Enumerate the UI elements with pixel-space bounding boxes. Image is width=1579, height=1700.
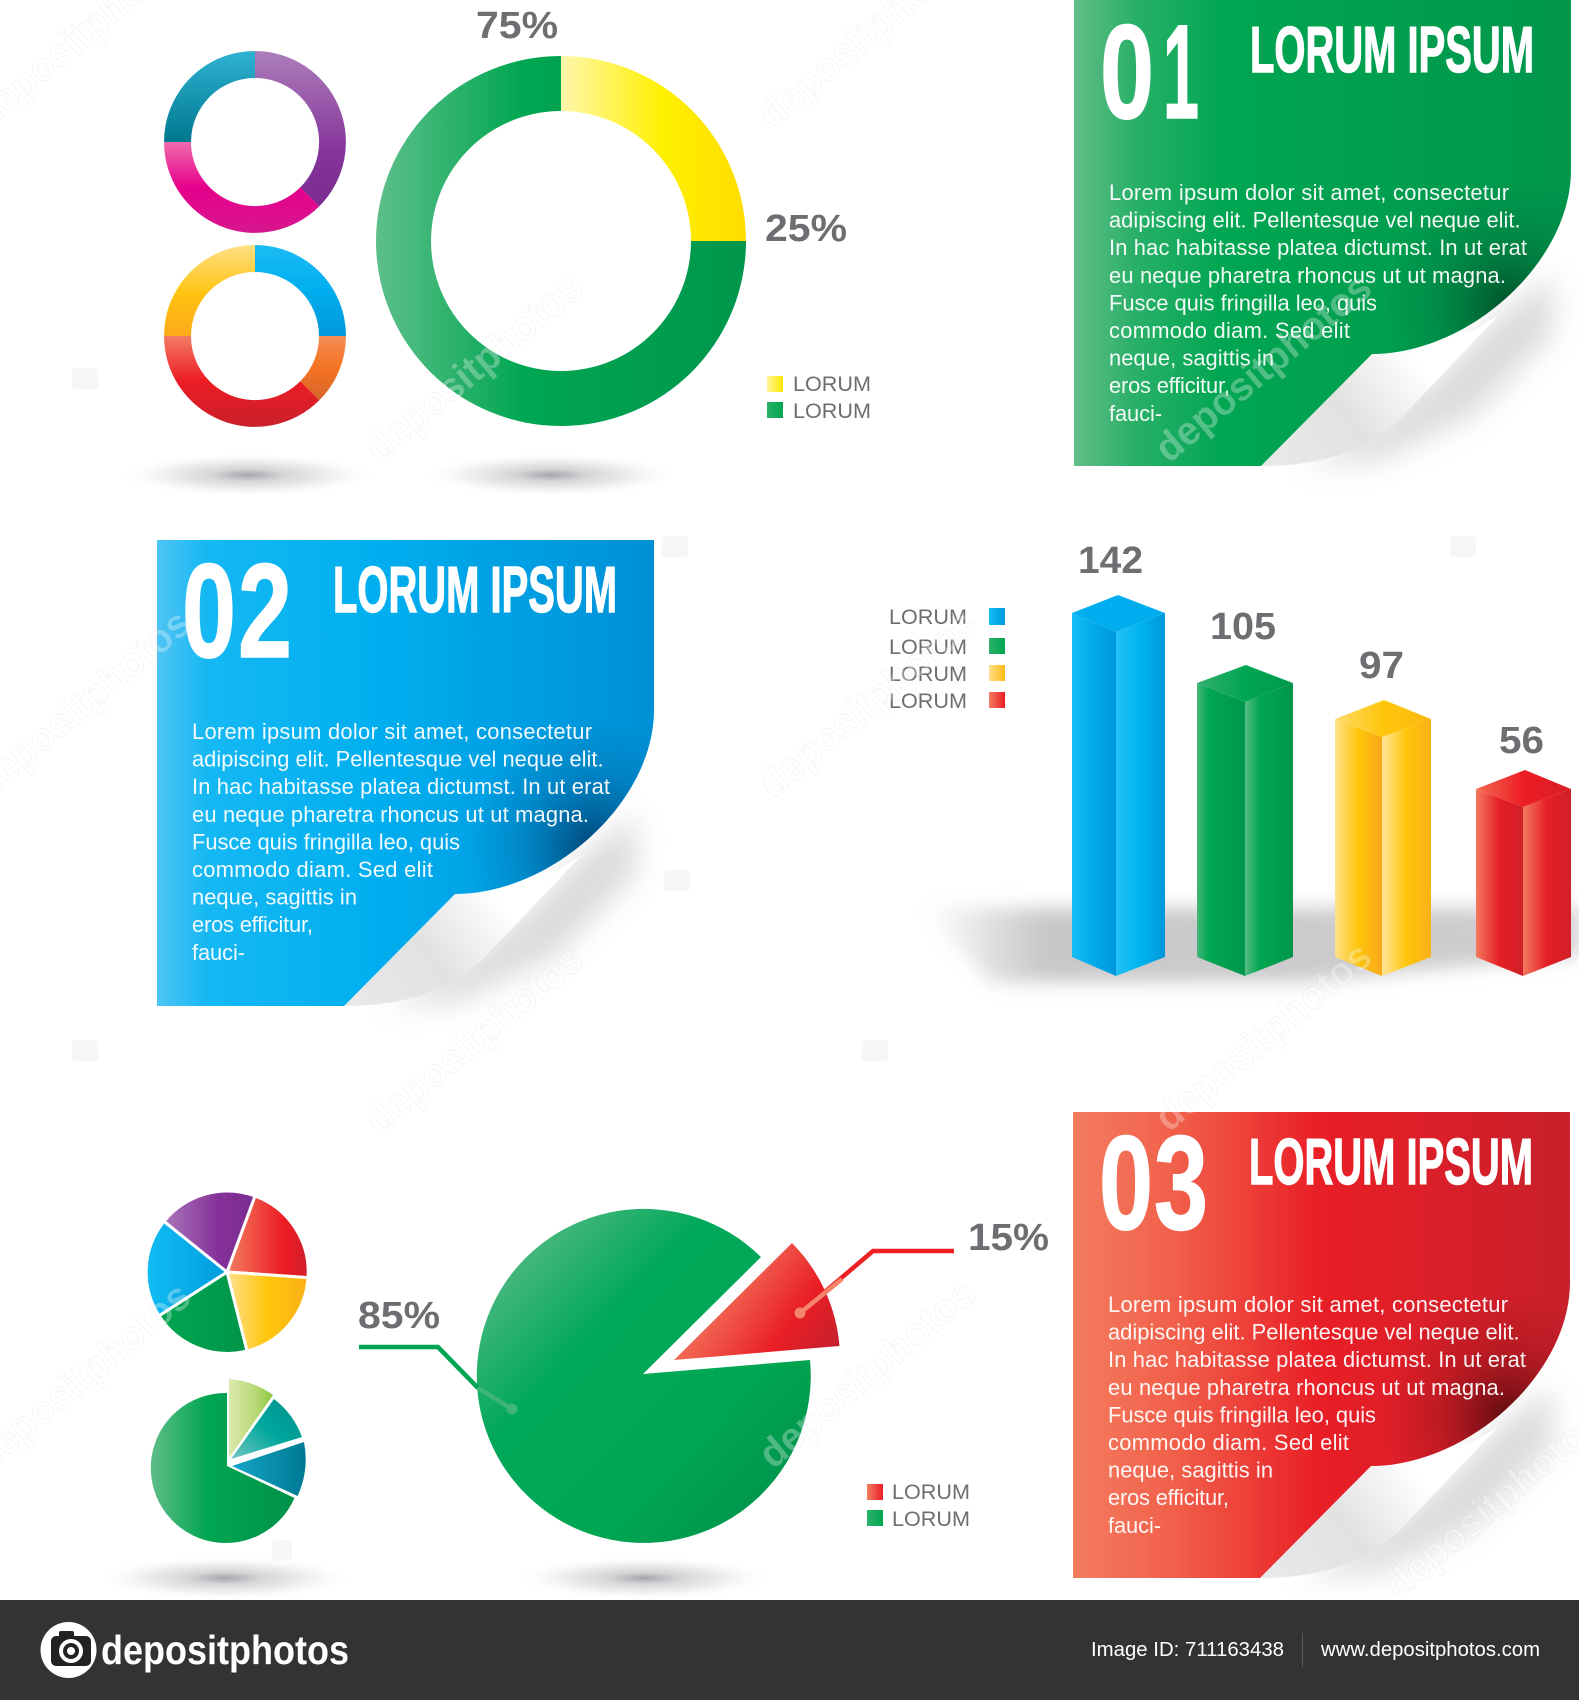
- footer bar: [0, 1600, 1579, 1700]
- bar chart: [1072, 595, 1571, 976]
- value 142: 142: [1078, 540, 1143, 582]
- body text: neque, sagittis in: [1108, 1458, 1273, 1483]
- watermarks: depositphotos: [358, 937, 591, 1143]
- pie legend: LORUM: [892, 1508, 970, 1531]
- body text: fauci-: [192, 940, 245, 965]
- pie legend: LORUM: [892, 1481, 970, 1504]
- body text: neque, sagittis in: [192, 885, 357, 910]
- body text: commodo diam. Sed elit: [1108, 1430, 1349, 1455]
- bar chart legend: LORUM: [889, 606, 967, 629]
- watermarks: depositphotos: [1147, 265, 1380, 471]
- body text: Lorem ipsum dolor sit amet, consectetur: [192, 719, 592, 744]
- body text: eu neque pharetra rhoncus ut ut magna.: [1109, 263, 1506, 288]
- body text: fauci-: [1109, 401, 1162, 426]
- bar chart shadow: [925, 908, 1579, 982]
- watermarks: depositphotos: [358, 265, 591, 471]
- label 25%: 25%: [765, 208, 847, 250]
- body text: eros efficitur,: [1108, 1485, 1229, 1510]
- panel 01: green note: 1: [1163, 0, 1199, 147]
- panel 01: green note: [1074, 0, 1571, 466]
- value 97: 97: [1359, 645, 1404, 687]
- footer logo icon: [40, 1622, 96, 1678]
- small pie chart: exploded slices: [151, 1379, 306, 1543]
- number 02: 2: [238, 537, 292, 686]
- body text: [1108, 1292, 1526, 1538]
- bar 105: [1197, 665, 1293, 976]
- donut legend: LORUM: [793, 373, 871, 396]
- footer brand name: depositphotos: [101, 1627, 349, 1673]
- small donut chart: purple, pink, blue: [164, 51, 346, 233]
- body text: Lorem ipsum dolor sit amet, consectetur: [1109, 180, 1509, 205]
- small pie chart: five slices: [146, 1191, 308, 1353]
- number 03: [1099, 1109, 1208, 1258]
- bar 142: [1072, 595, 1165, 976]
- body text: fauci-: [1108, 1513, 1161, 1538]
- body text: In hac habitasse platea dictumst. In ut erat: [1109, 235, 1527, 260]
- leader line: 85%: [359, 1347, 518, 1414]
- small donut chart: blue, orange, red, yellow: [164, 245, 346, 427]
- label 15%: 15%: [968, 1217, 1049, 1259]
- body text: [1109, 180, 1527, 426]
- large donut chart 75/25: [376, 56, 746, 426]
- body text: In hac habitasse platea dictumst. In ut erat: [192, 774, 610, 799]
- body text: Fusce quis fringilla leo, quis: [1108, 1402, 1376, 1427]
- number 01: 0: [1100, 0, 1154, 147]
- body text: In hac habitasse platea dictumst. In ut erat: [1108, 1347, 1526, 1372]
- bar chart legend: LORUM: [889, 663, 967, 686]
- label 85%: 85%: [358, 1295, 440, 1337]
- image id: Image ID: 711163438: [1091, 1639, 1284, 1661]
- donut legend: LORUM: [793, 400, 871, 423]
- bar chart legend: [889, 606, 1005, 713]
- number 03: 0: [1099, 1109, 1153, 1258]
- body text: eu neque pharetra rhoncus ut ut magna.: [192, 802, 589, 827]
- donut legend: [767, 373, 871, 423]
- body text: adipiscing elit. Pellentesque vel neque elit.: [1108, 1320, 1520, 1345]
- body text: Lorem ipsum dolor sit amet, consectetur: [1108, 1292, 1508, 1317]
- number 02: 0: [182, 537, 236, 686]
- body text: commodo diam. Sed elit: [192, 857, 433, 882]
- value 105: 105: [1210, 606, 1276, 648]
- body text: eros efficitur,: [192, 912, 313, 937]
- body text: Fusce quis fringilla leo, quis: [1109, 290, 1377, 315]
- body text: commodo diam. Sed elit: [1109, 318, 1350, 343]
- body text: neque, sagittis in: [1109, 346, 1274, 371]
- body text: Fusce quis fringilla leo, quis: [192, 829, 460, 854]
- pie legend: [867, 1481, 970, 1531]
- panel 02: blue note: [157, 537, 654, 1006]
- watermarks: depositphotos: [1147, 934, 1380, 1140]
- label 75%: 75%: [476, 5, 558, 47]
- body text: [192, 719, 610, 965]
- body text: adipiscing elit. Pellentesque vel neque elit.: [1109, 208, 1521, 233]
- bar 97: [1335, 700, 1431, 976]
- number 02: [182, 537, 292, 686]
- bar chart legend: LORUM: [889, 690, 967, 713]
- footer divider: [1302, 1633, 1303, 1667]
- panel 03: red note: [1073, 1109, 1570, 1578]
- number 03: 3: [1154, 1109, 1208, 1258]
- bar chart legend: LORUM: [889, 636, 967, 659]
- ground shadows under donuts: [118, 453, 681, 497]
- faint camera watermarks: [72, 368, 1476, 1561]
- watermarks: depositphotos: [751, 1271, 984, 1477]
- bar 56: [1476, 770, 1571, 976]
- large pie chart 85/15: [477, 1209, 840, 1543]
- leader line: 15%: [794, 1251, 954, 1318]
- watermarks: depositphotos: [751, 601, 984, 807]
- body text: eu neque pharetra rhoncus ut ut magna.: [1108, 1375, 1505, 1400]
- heading: LORUM IPSUM: [333, 553, 617, 626]
- website: www.depositphotos.com: [1320, 1639, 1540, 1661]
- value 56: 56: [1499, 720, 1544, 762]
- body text: eros efficitur,: [1109, 373, 1230, 398]
- ground shadows under pies: [95, 1556, 774, 1600]
- body text: adipiscing elit. Pellentesque vel neque elit.: [192, 747, 604, 772]
